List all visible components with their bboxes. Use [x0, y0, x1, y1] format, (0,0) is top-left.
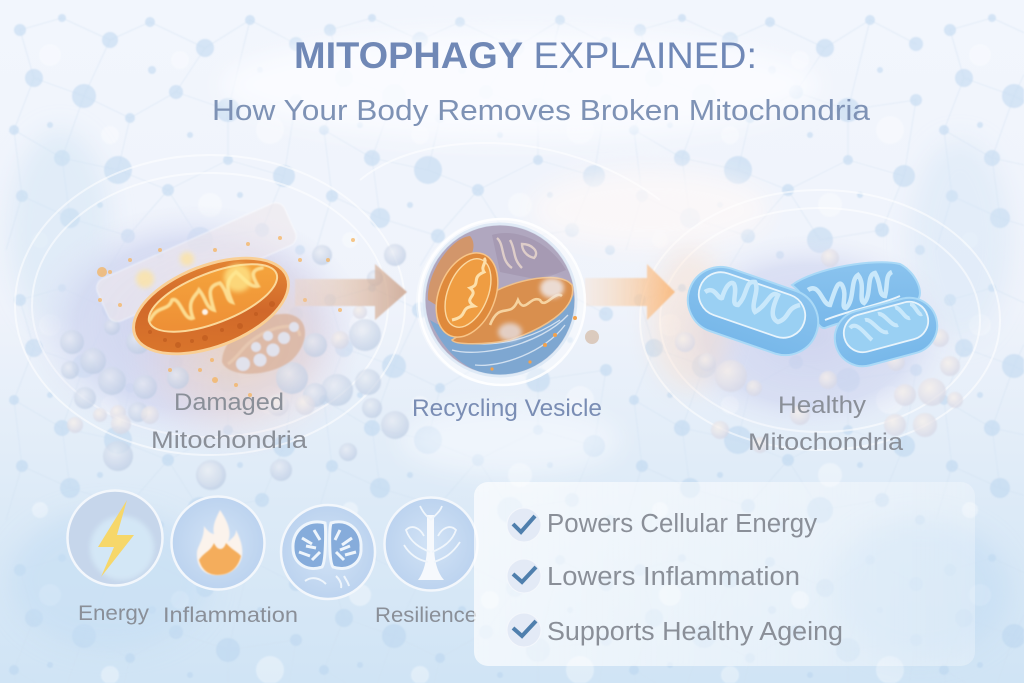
glow: healthy cell region: [650, 235, 960, 435]
arrow: vesicle to healthy: [585, 264, 675, 320]
subtitle: How Your Body Removes Broken Mitochondria: [212, 95, 871, 127]
healthy mitochondrion right: [829, 291, 943, 373]
secondary damaged organelle: [222, 314, 305, 374]
check: lowers inflammation: [507, 559, 541, 593]
icon: damaged mitochondrion: [118, 237, 304, 375]
large faint cell outlines: [15, 143, 1000, 455]
cell bubbles: [60, 244, 963, 490]
label: damaged mitochondria: Mitochondria: [151, 427, 307, 454]
glow: damaged cell region: [25, 205, 365, 460]
left tube organelle: [428, 236, 474, 305]
check: supports healthy ageing: [507, 613, 541, 647]
icon: energy: [68, 490, 162, 586]
damaged organelle: ghost tube behind: [93, 199, 299, 325]
healthy mitochondrion left: [679, 258, 827, 364]
icon: healthy mitochondria group: [679, 258, 943, 373]
label: inflammation: Inflammation: [163, 604, 298, 627]
healthy mitochondrion rear: [792, 262, 920, 328]
label: healthy mitochondria: Mitochondria: [748, 429, 903, 456]
text: supports healthy ageing: Supports Healthy Ageing: [547, 618, 843, 646]
text: powers cellular energy: Powers Cellular Energy: [547, 510, 817, 538]
sparkles: orange particles: [97, 236, 355, 397]
icon: brain: [281, 505, 375, 599]
label: damaged mitochondria: Damaged: [174, 389, 284, 416]
icon: recycling vesicle: [416, 218, 599, 386]
arrow: damaged to vesicle: [295, 264, 407, 320]
vesicle front mitochondrion: [425, 244, 509, 346]
vesicle pale curls: [497, 238, 536, 268]
label: recycling vesicle: Recycling Vesicle: [412, 395, 602, 422]
vesicle membrane swirls: [452, 315, 568, 365]
label: energy: Energy: [78, 602, 150, 625]
vesicle right mitochondrion: [452, 277, 573, 344]
label: healthy mitochondria: Healthy: [778, 392, 867, 419]
icon: inflammation: [172, 496, 264, 590]
label: resilience: Resilience: [375, 604, 477, 627]
title: MITOPHAGY EXPLAINED:: [294, 35, 757, 76]
text: lowers inflammation: Lowers Inflammation: [547, 563, 800, 591]
label: healthy mitochondria: [748, 392, 903, 456]
check: powers cellular energy: [507, 508, 541, 542]
icon: tree: [384, 498, 478, 590]
panel: benefits: [474, 482, 975, 666]
label: damaged mitochondria: [151, 389, 307, 454]
vesicle ghost organelle: [492, 233, 566, 280]
